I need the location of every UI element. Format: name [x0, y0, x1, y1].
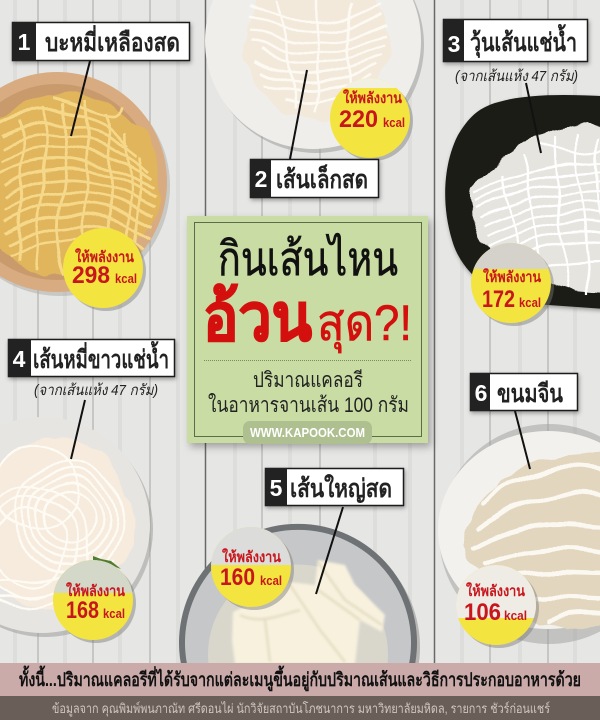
calorie badge 5: 160 kcal: kcal [260, 573, 282, 588]
label 3: 3 [448, 31, 460, 57]
source credit band [0, 696, 600, 720]
calorie badge 6: 106 kcal [455, 563, 539, 648]
calorie badge 6: 106 kcal: 106 [464, 599, 501, 626]
calorie badge 4: 168 kcal: ให้พลังงาน [66, 582, 126, 600]
plate 3: glass noodles on black plate [445, 95, 600, 310]
plate 5: wide rice noodle sheets on grey plate [179, 524, 420, 664]
calorie badge 4: 168 kcal [52, 558, 136, 643]
label 4 [8, 339, 174, 377]
subtitle [208, 369, 409, 417]
calorie badge 2: 220 kcal [330, 70, 413, 161]
calorie badge 1: 298 kcal: kcal [115, 271, 137, 286]
calorie badge 6: 106 kcal: ให้พลังงาน [466, 582, 526, 600]
plate 1: yellow egg noodles on wooden plate [0, 72, 170, 296]
calorie badge 1: 298 kcal: 298 [72, 262, 110, 289]
label 2 [250, 159, 378, 198]
label 5: เส้นใหญ่สด [290, 473, 392, 503]
label 2: เส้นเล็กสด [276, 164, 368, 194]
calorie badge 3: 172 kcal: ให้พลังงาน [483, 268, 542, 286]
subtitle: ปริมาณแคลอรี [253, 369, 363, 392]
label 6: ขนมจีน [497, 380, 563, 408]
title line 2 [203, 280, 412, 354]
subtitle: ในอาหารจานเส้น 100 กรัม [208, 393, 409, 417]
label 5: 5 [270, 475, 283, 501]
label 1 [12, 22, 190, 61]
calorie badge 4: 168 kcal: kcal [103, 606, 125, 621]
calorie badge 5: 160 kcal: ให้พลังงาน [222, 548, 282, 566]
label 2: 2 [255, 166, 267, 192]
label 5 [265, 468, 404, 506]
label 4: เส้นหมี่ขาวแช่น้ำ [33, 340, 169, 374]
title line 2: อ้วน [203, 280, 312, 354]
label 4: 4 [13, 346, 26, 372]
calorie badge 2: 220 kcal: kcal [383, 115, 405, 130]
title line 2: สุด?! [317, 295, 412, 353]
label 1: 1 [18, 29, 31, 55]
label 1: บะหมี่เหลืองสด [45, 25, 180, 57]
leader lines [71, 61, 541, 594]
calorie badge 2: 220 kcal: ให้พลังงาน [343, 89, 403, 107]
note for label 3: (จากเส้นแห้ง 47 กรัม) [455, 68, 578, 85]
plate 2: fresh thin rice noodles on white plate [205, 0, 424, 153]
label 3 [443, 19, 588, 62]
calorie badge 5: 160 kcal: 160 [220, 564, 255, 591]
calorie badge 3: 172 kcal: kcal [519, 295, 541, 310]
calorie badge 1: 298 kcal [63, 228, 146, 311]
plate 6: khanom chin noodles on white plate [438, 424, 600, 644]
calorie badge 6: 106 kcal: kcal [504, 608, 527, 623]
calorie badge 4: 168 kcal: 168 [66, 597, 99, 624]
note for label 4: (จากเส้นแห้ง 47 กรัม) [34, 382, 158, 399]
plate 4: white vermicelli on white plate [0, 417, 153, 637]
label 6 [470, 373, 578, 411]
website tag: WWW.KAPOOK.COM [250, 425, 365, 440]
calorie badge 2: 220 kcal: 220 [339, 106, 378, 133]
calorie badge 1: 298 kcal: ให้พลังงาน [75, 248, 135, 266]
website tag [243, 421, 372, 444]
calorie badge 3: 172 kcal: 172 [482, 286, 515, 313]
bottom note band [0, 663, 600, 696]
label 6: 6 [475, 380, 487, 406]
title line 1: กินเส้นไหน [218, 232, 398, 285]
calorie badge 5: 160 kcal [210, 525, 294, 610]
calorie badge 3: 172 kcal [470, 240, 554, 326]
centre title panel [187, 216, 428, 444]
